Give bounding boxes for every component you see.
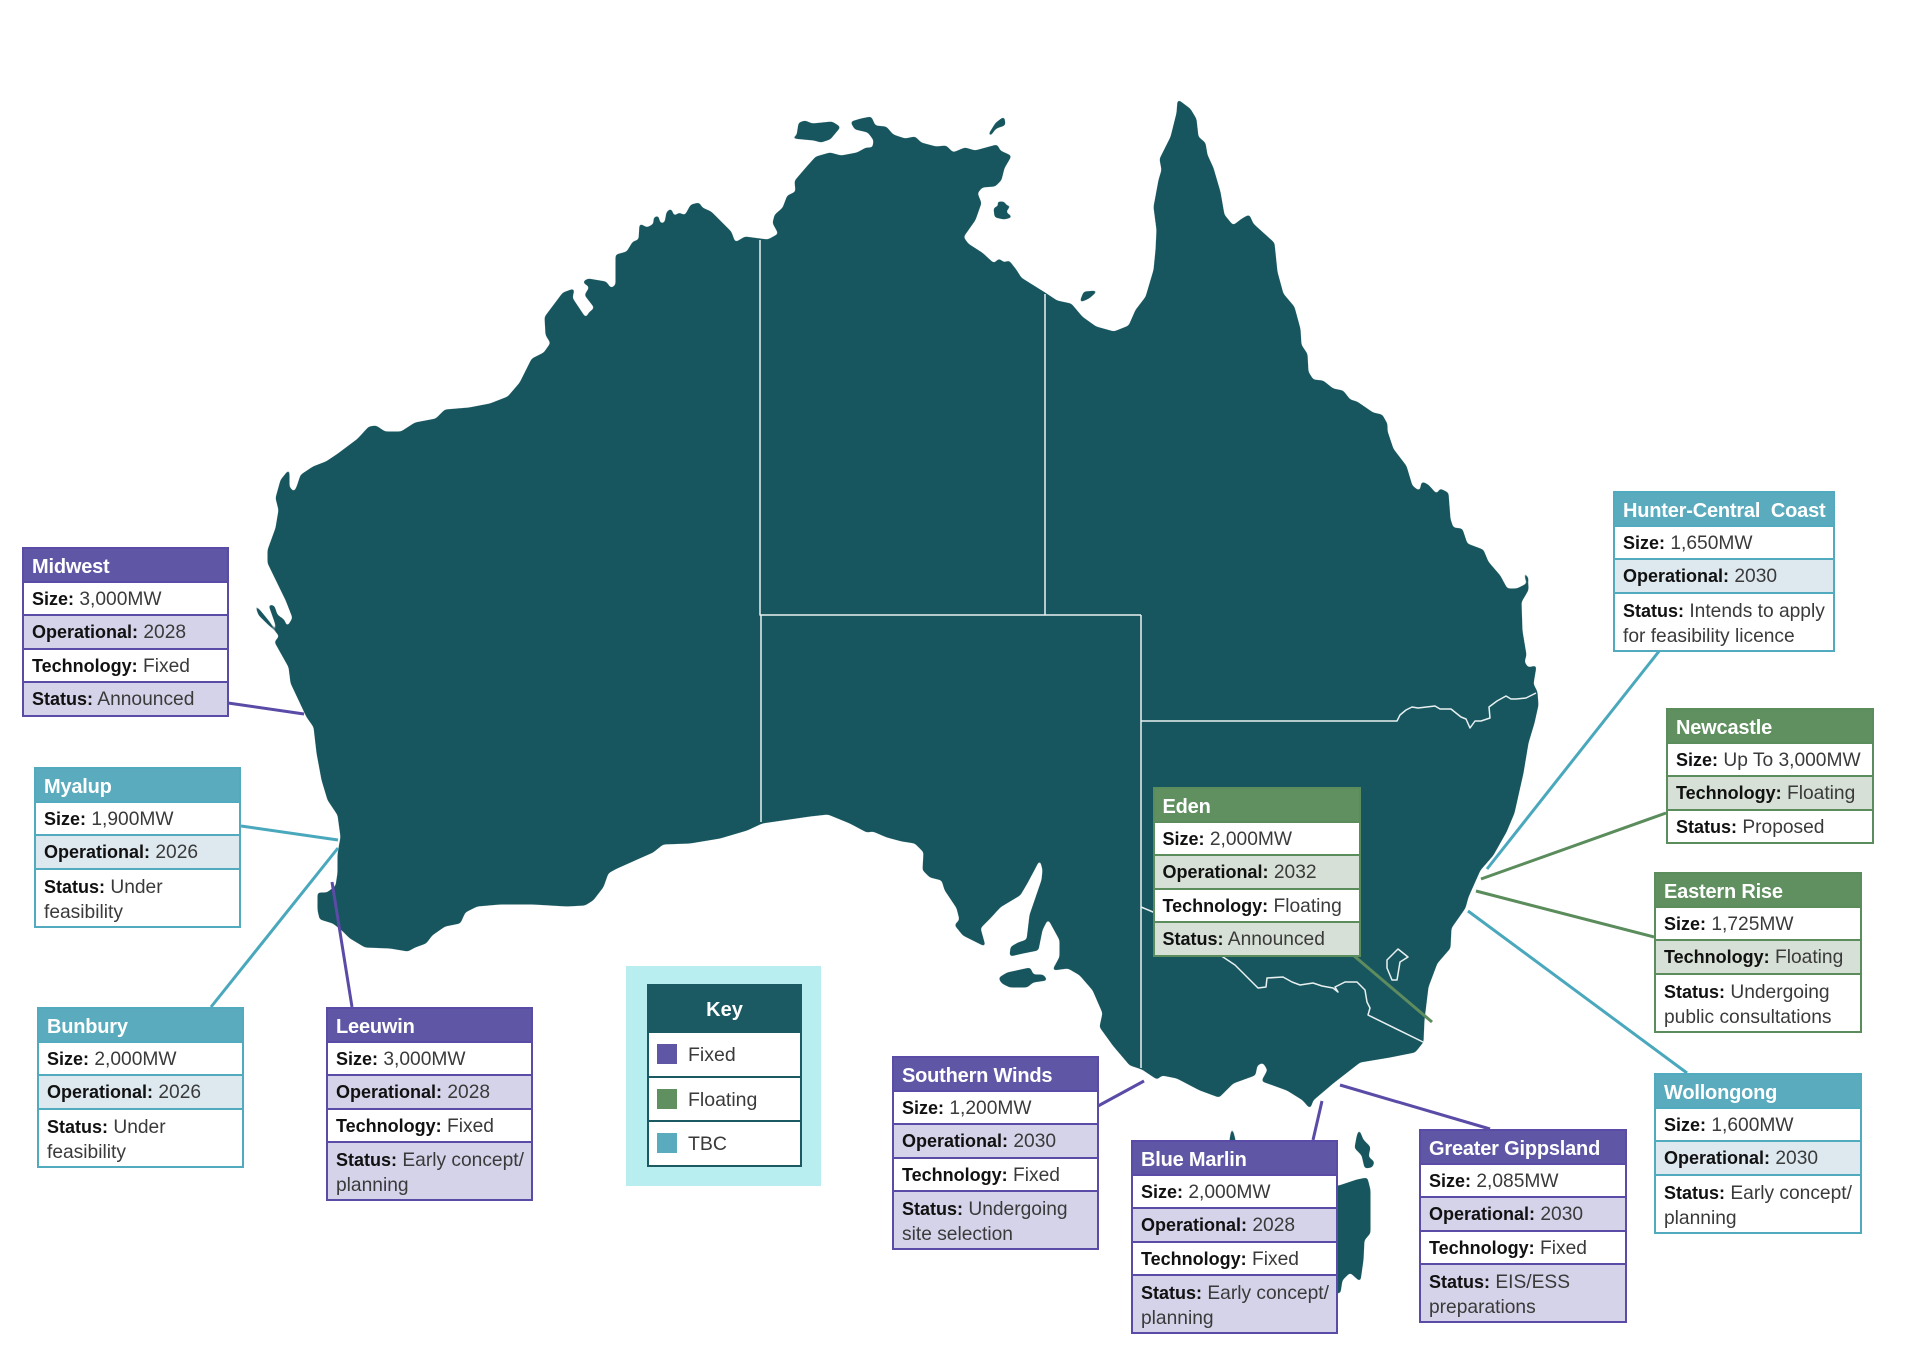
- status: for feasibility licence: [1623, 626, 1795, 647]
- operational: Operational: 2028: [1141, 1215, 1295, 1236]
- operational: Operational: 2026: [44, 842, 198, 863]
- heading: Greater Gippsland: [1421, 1131, 1625, 1163]
- status: [1656, 973, 1860, 1031]
- Croker Island: [989, 117, 1005, 136]
- panel: Midwest: [22, 547, 229, 717]
- line: Midwest: [228, 703, 304, 714]
- key item: fixed: Fixed: [688, 1044, 736, 1066]
- status: [1421, 1263, 1625, 1321]
- status: planning: [336, 1175, 409, 1196]
- status: Status: Undergoing: [902, 1199, 1068, 1220]
- size: [894, 1090, 1097, 1123]
- heading: Newcastle: [1668, 710, 1872, 742]
- size: Size: 2,000MW: [1141, 1182, 1270, 1203]
- size: Size: 1,900MW: [44, 809, 173, 830]
- key background panel: [626, 966, 821, 1186]
- heading: Leeuwin: [328, 1009, 531, 1041]
- technology: [1133, 1241, 1336, 1274]
- heading: Wollongong: Wollongong: [1664, 1082, 1777, 1104]
- panel: Leeuwin: [326, 1007, 533, 1201]
- heading: Myalup: Myalup: [44, 776, 112, 798]
- line: Greater Gippsland: [1340, 1085, 1490, 1129]
- Tasmania: [1300, 1178, 1370, 1293]
- line: Leeuwin: [332, 882, 352, 1007]
- leader lines: [211, 650, 1687, 1140]
- size: [1154, 821, 1358, 854]
- size: [39, 1041, 242, 1074]
- status: Status: Early concept/: [1664, 1183, 1852, 1204]
- heading: Midwest: [24, 549, 227, 581]
- state borders: [760, 240, 1536, 1068]
- status: [24, 681, 227, 715]
- heading: Southern Winds: Southern Winds: [902, 1065, 1052, 1087]
- size: Size: 1,650MW: [1623, 533, 1752, 554]
- status: [36, 868, 239, 926]
- technology: [1656, 939, 1860, 973]
- size: [1656, 1107, 1860, 1140]
- key item: TBC: TBC: [688, 1133, 727, 1155]
- operational: [39, 1074, 242, 1108]
- status: feasibility: [47, 1142, 126, 1163]
- line: Myalup: [241, 826, 338, 840]
- size: Size: 1,725MW: [1664, 914, 1793, 935]
- heading: Bunbury: [39, 1009, 242, 1041]
- heading: Myalup: [36, 769, 239, 801]
- technology: [24, 648, 227, 681]
- technology: [1668, 775, 1872, 809]
- status: Status: Undergoing: [1664, 982, 1830, 1003]
- status: Status: Intends to apply: [1623, 601, 1825, 622]
- operational: Operational: 2030: [1664, 1148, 1818, 1169]
- heading: Hunter-Central Coast: [1615, 493, 1833, 525]
- heading: Greater Gippsland: Greater Gippsland: [1429, 1138, 1600, 1160]
- Kangaroo Island: [999, 968, 1047, 987]
- technology: Technology: Floating: [1162, 896, 1342, 917]
- status: planning: [1664, 1208, 1737, 1229]
- status: [1656, 1174, 1860, 1232]
- status: [1154, 921, 1358, 955]
- line: Hunter-Central Coast: [1487, 650, 1660, 869]
- panel: Eden: [1152, 787, 1360, 957]
- operational: [1656, 1140, 1860, 1174]
- heading: Leeuwin: Leeuwin: [336, 1016, 415, 1038]
- operational: [894, 1123, 1097, 1157]
- size: [24, 581, 227, 614]
- operational: [1133, 1207, 1336, 1241]
- heading: Bunbury: Bunbury: [47, 1016, 128, 1038]
- status: Status: Proposed: [1676, 817, 1824, 838]
- technology: [328, 1108, 531, 1141]
- Mornington Island: [1080, 291, 1097, 302]
- technology: Technology: Floating: [1664, 947, 1843, 968]
- status: Status: Early concept/: [1141, 1283, 1329, 1304]
- panel: Myalup: [34, 767, 241, 928]
- Bathurst and Melville islands: [792, 121, 840, 142]
- size: [1133, 1174, 1336, 1207]
- size: [1668, 742, 1872, 775]
- size: Size: 2,000MW: [47, 1049, 176, 1070]
- status: Status: Under: [47, 1117, 166, 1138]
- size: [1615, 525, 1833, 558]
- key item: floating: [649, 1076, 800, 1120]
- status: [1133, 1274, 1336, 1332]
- key item: fixed: [649, 1031, 800, 1076]
- line: Newcastle: [1481, 813, 1666, 879]
- legend: key: [647, 984, 802, 1167]
- status: preparations: [1429, 1297, 1536, 1318]
- status: Status: Under: [44, 877, 163, 898]
- Flinders Island: [1355, 1130, 1374, 1168]
- status: planning: [1141, 1308, 1214, 1329]
- panel: Bunbury: [37, 1007, 244, 1168]
- status: Status: Announced: [32, 689, 194, 710]
- size: Size: 2,085MW: [1429, 1171, 1558, 1192]
- status: Status: Announced: [1162, 929, 1325, 950]
- technology: [1154, 888, 1358, 921]
- panel: Newcastle: [1666, 708, 1874, 844]
- line: Bunbury: [211, 848, 338, 1007]
- heading: Wollongong: [1656, 1075, 1860, 1107]
- operational: [24, 614, 227, 648]
- panel: Blue Marlin: [1131, 1140, 1338, 1334]
- line: Blue Marlin: [1313, 1101, 1322, 1140]
- status: [1668, 809, 1872, 842]
- Groote Eylandt: [994, 202, 1012, 219]
- operational: Operational: 2028: [32, 622, 186, 643]
- heading: Blue Marlin: Blue Marlin: [1141, 1149, 1247, 1171]
- operational: [1421, 1196, 1625, 1230]
- size: Size: 2,000MW: [1162, 829, 1292, 850]
- heading: Hunter-Central Coast: Hunter-Central Coast: [1623, 500, 1826, 522]
- line: Eden: [1353, 955, 1432, 1022]
- technology: Technology: Fixed: [336, 1116, 494, 1137]
- map of Australia: [255, 100, 1538, 1293]
- heading: Eastern Rise: [1656, 874, 1860, 906]
- technology: [1421, 1230, 1625, 1263]
- status: [1615, 592, 1833, 650]
- heading: Midwest: Midwest: [32, 556, 110, 578]
- key item: floating: Floating: [688, 1089, 757, 1111]
- size: [1421, 1163, 1625, 1196]
- heading: Eastern Rise: Eastern Rise: [1664, 881, 1783, 903]
- heading: Blue Marlin: [1133, 1142, 1336, 1174]
- size: Size: 3,000MW: [32, 589, 161, 610]
- technology: Technology: Fixed: [32, 656, 190, 677]
- operational: Operational: 2028: [336, 1082, 490, 1103]
- status: [894, 1190, 1097, 1248]
- technology: Technology: Fixed: [1429, 1238, 1587, 1259]
- technology: Technology: Floating: [1676, 783, 1855, 804]
- King Island: [1229, 1128, 1235, 1170]
- technology: Technology: Fixed: [902, 1165, 1060, 1186]
- line: Eastern Rise: [1476, 891, 1654, 937]
- panel: Eastern Rise: [1654, 872, 1862, 1033]
- heading: Eden: [1154, 789, 1358, 821]
- panel: Southern Winds: [892, 1056, 1099, 1250]
- heading: Eden: Eden: [1162, 796, 1211, 818]
- status: [328, 1141, 531, 1199]
- status: site selection: [902, 1224, 1013, 1245]
- size: Size: 1,200MW: [902, 1098, 1031, 1119]
- line: Wollongong: [1468, 911, 1687, 1073]
- line: Southern Winds: [1098, 1081, 1144, 1106]
- operational: [36, 834, 239, 868]
- status: Status: Early concept/: [336, 1150, 524, 1171]
- operational: Operational: 2030: [902, 1131, 1056, 1152]
- size: Size: 3,000MW: [336, 1049, 465, 1070]
- operational: [1154, 854, 1358, 888]
- heading: Southern Winds: [894, 1058, 1097, 1090]
- operational: Operational: 2026: [47, 1082, 201, 1103]
- size: [328, 1041, 531, 1074]
- key heading: Key: [706, 999, 743, 1021]
- technology: [894, 1157, 1097, 1190]
- size: Size: 1,600MW: [1664, 1115, 1793, 1136]
- operational: [1615, 558, 1833, 592]
- size: [1656, 906, 1860, 939]
- mainland: [255, 100, 1538, 1108]
- operational: Operational: 2032: [1162, 862, 1317, 883]
- panel: Greater Gippsland: [1419, 1129, 1627, 1323]
- status: feasibility: [44, 902, 123, 923]
- panel: Hunter-Central Coast: [1613, 491, 1835, 652]
- status: [39, 1108, 242, 1166]
- operational: Operational: 2030: [1623, 566, 1777, 587]
- status: Status: EIS/ESS: [1429, 1272, 1570, 1293]
- status: public consultations: [1664, 1007, 1831, 1028]
- operational: [328, 1074, 531, 1108]
- technology: Technology: Fixed: [1141, 1249, 1299, 1270]
- key item: TBC: [649, 1120, 800, 1165]
- panel: Wollongong: [1654, 1073, 1862, 1234]
- size: [36, 801, 239, 834]
- size: Size: Up To 3,000MW: [1676, 750, 1861, 771]
- Australian Capital Territory outline: [1387, 949, 1408, 980]
- key heading: [649, 986, 800, 1031]
- heading: Newcastle: Newcastle: [1676, 717, 1772, 739]
- operational: Operational: 2030: [1429, 1204, 1583, 1225]
